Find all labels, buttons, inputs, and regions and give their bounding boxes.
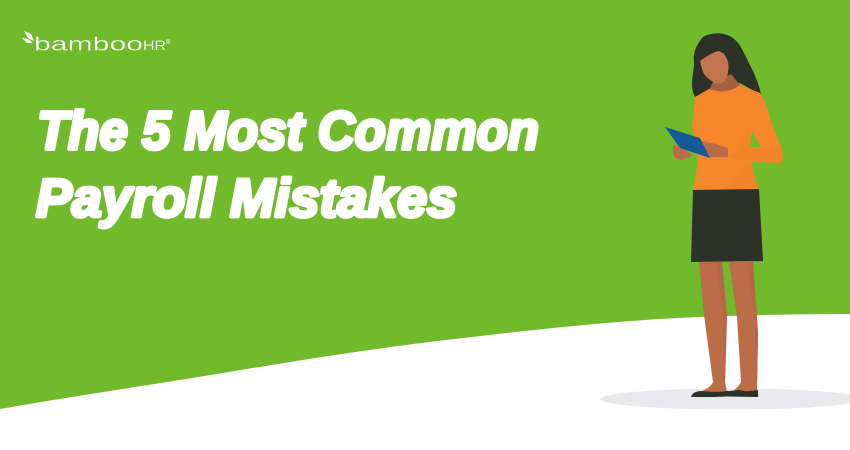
- face: [700, 51, 729, 84]
- illustration: woman reading a tablet: [665, 33, 783, 397]
- right leg: [729, 262, 758, 393]
- title line 2: Payroll Mistakes: [36, 168, 457, 228]
- hair: [692, 33, 761, 97]
- icon: bamboo leaves: [22, 31, 34, 43]
- logo registered mark: ®: [166, 39, 171, 46]
- sweater arm shading: [722, 122, 782, 191]
- hand holding tablet: [673, 145, 692, 160]
- near hand and forearm: [702, 141, 728, 157]
- tablet: [665, 127, 710, 158]
- neck: [709, 74, 740, 92]
- right leg shading: [747, 262, 758, 382]
- left leg: [698, 262, 727, 393]
- shoes: [691, 390, 758, 397]
- logo HR mark: HR: [143, 37, 166, 53]
- ground shadow: [600, 388, 850, 410]
- title line 1: The 5 Most Common: [37, 101, 539, 161]
- skirt: [691, 189, 763, 262]
- title: [36, 101, 539, 228]
- logo: BambooHR: [22, 31, 171, 56]
- orange sweater: [692, 85, 783, 191]
- panel: white curved ground: [0, 314, 850, 450]
- gap between arm and body: [750, 131, 761, 147]
- logo wordmark: bamboo: [34, 34, 143, 56]
- left leg shading: [716, 262, 727, 382]
